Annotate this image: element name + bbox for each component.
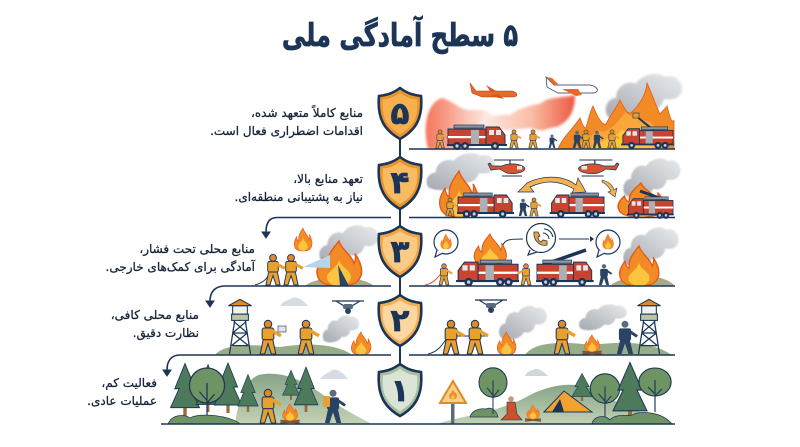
phone bubble [526, 224, 556, 255]
plane 2 dropping retardant [546, 77, 597, 96]
small arrow [602, 180, 617, 197]
hose [255, 272, 270, 285]
retardant cloud [426, 95, 575, 149]
ladder [543, 250, 586, 265]
shield 3: ۳ [391, 234, 410, 270]
text: level 3: منابع محلی تحت فشار، [139, 242, 255, 257]
text: level 2: منابع محلی کافی، [111, 308, 199, 322]
flame behind truck [474, 234, 506, 266]
panel: level 2 left scene [215, 298, 371, 355]
text: level 3 [106, 242, 256, 275]
cloud [525, 369, 548, 376]
call arrows [503, 239, 589, 245]
kneeling person [501, 396, 522, 420]
text: level 2 [111, 308, 199, 341]
mound [305, 278, 374, 286]
bushes [592, 413, 672, 424]
crew [436, 130, 619, 148]
shield 2 [379, 295, 421, 346]
mound [525, 343, 672, 355]
ground lines and connector arrows [161, 149, 675, 424]
shield 2: ۲ [391, 303, 410, 339]
shield 1 [379, 364, 421, 416]
panel: level 4 scene [427, 153, 681, 219]
panel: level 3 left scene [255, 225, 378, 286]
text: level 1: عملیات عادی. [87, 394, 157, 408]
panel: level 2 scene [428, 299, 672, 355]
shield 1: ۱ [391, 373, 409, 409]
text: level 1 [87, 376, 157, 408]
panel: level 5 scene [426, 74, 682, 150]
ladder truck [621, 113, 674, 149]
cloud [280, 298, 308, 306]
cloud [320, 370, 348, 379]
crew pair [519, 198, 541, 216]
text: level 1: فعالیت کم، [101, 376, 157, 390]
water spray [303, 255, 330, 268]
smoke [427, 153, 495, 190]
text: level 5: منابع کاملاً متعهد شده، [251, 105, 363, 120]
hose [428, 336, 488, 354]
smoke [606, 74, 682, 120]
alert bubbles [434, 230, 458, 257]
text: level 2: نظارت دقیق. [133, 326, 199, 341]
text: level 5: اقدامات اضطراری فعال است. [210, 124, 363, 139]
plane 1 [470, 83, 517, 99]
panel: level 3 scene [425, 224, 679, 286]
text: level 4: نیاز به پشتیبانی منطقه‌ای. [235, 190, 363, 205]
hill [436, 385, 672, 424]
warning sign [440, 381, 466, 424]
truck [447, 125, 507, 150]
text: level 4: تعهد منابع بالا، [293, 172, 363, 186]
title: ۵ سطح آمادگی ملی [282, 16, 518, 54]
shield 4: ۴ [391, 165, 409, 201]
tent [544, 391, 592, 412]
helicopter right [579, 160, 619, 176]
mound [610, 276, 675, 286]
shield 4 [379, 157, 421, 209]
wildfire [558, 83, 674, 149]
ladder truck [627, 191, 674, 219]
panel: level 1 scene [436, 362, 672, 424]
double arrow [518, 177, 586, 193]
shield 5 [379, 88, 421, 139]
text: level 3: آمادگی برای کمک‌های خارجی. [106, 259, 256, 275]
panel: level 1 left scene [168, 363, 372, 424]
shield 5: ۵ [391, 96, 409, 132]
hose [425, 272, 442, 285]
helicopter left [488, 160, 525, 176]
shield 3 [379, 226, 421, 277]
text: level 4 [235, 172, 363, 205]
text: level 5 [210, 105, 363, 139]
central connector [399, 139, 401, 363]
